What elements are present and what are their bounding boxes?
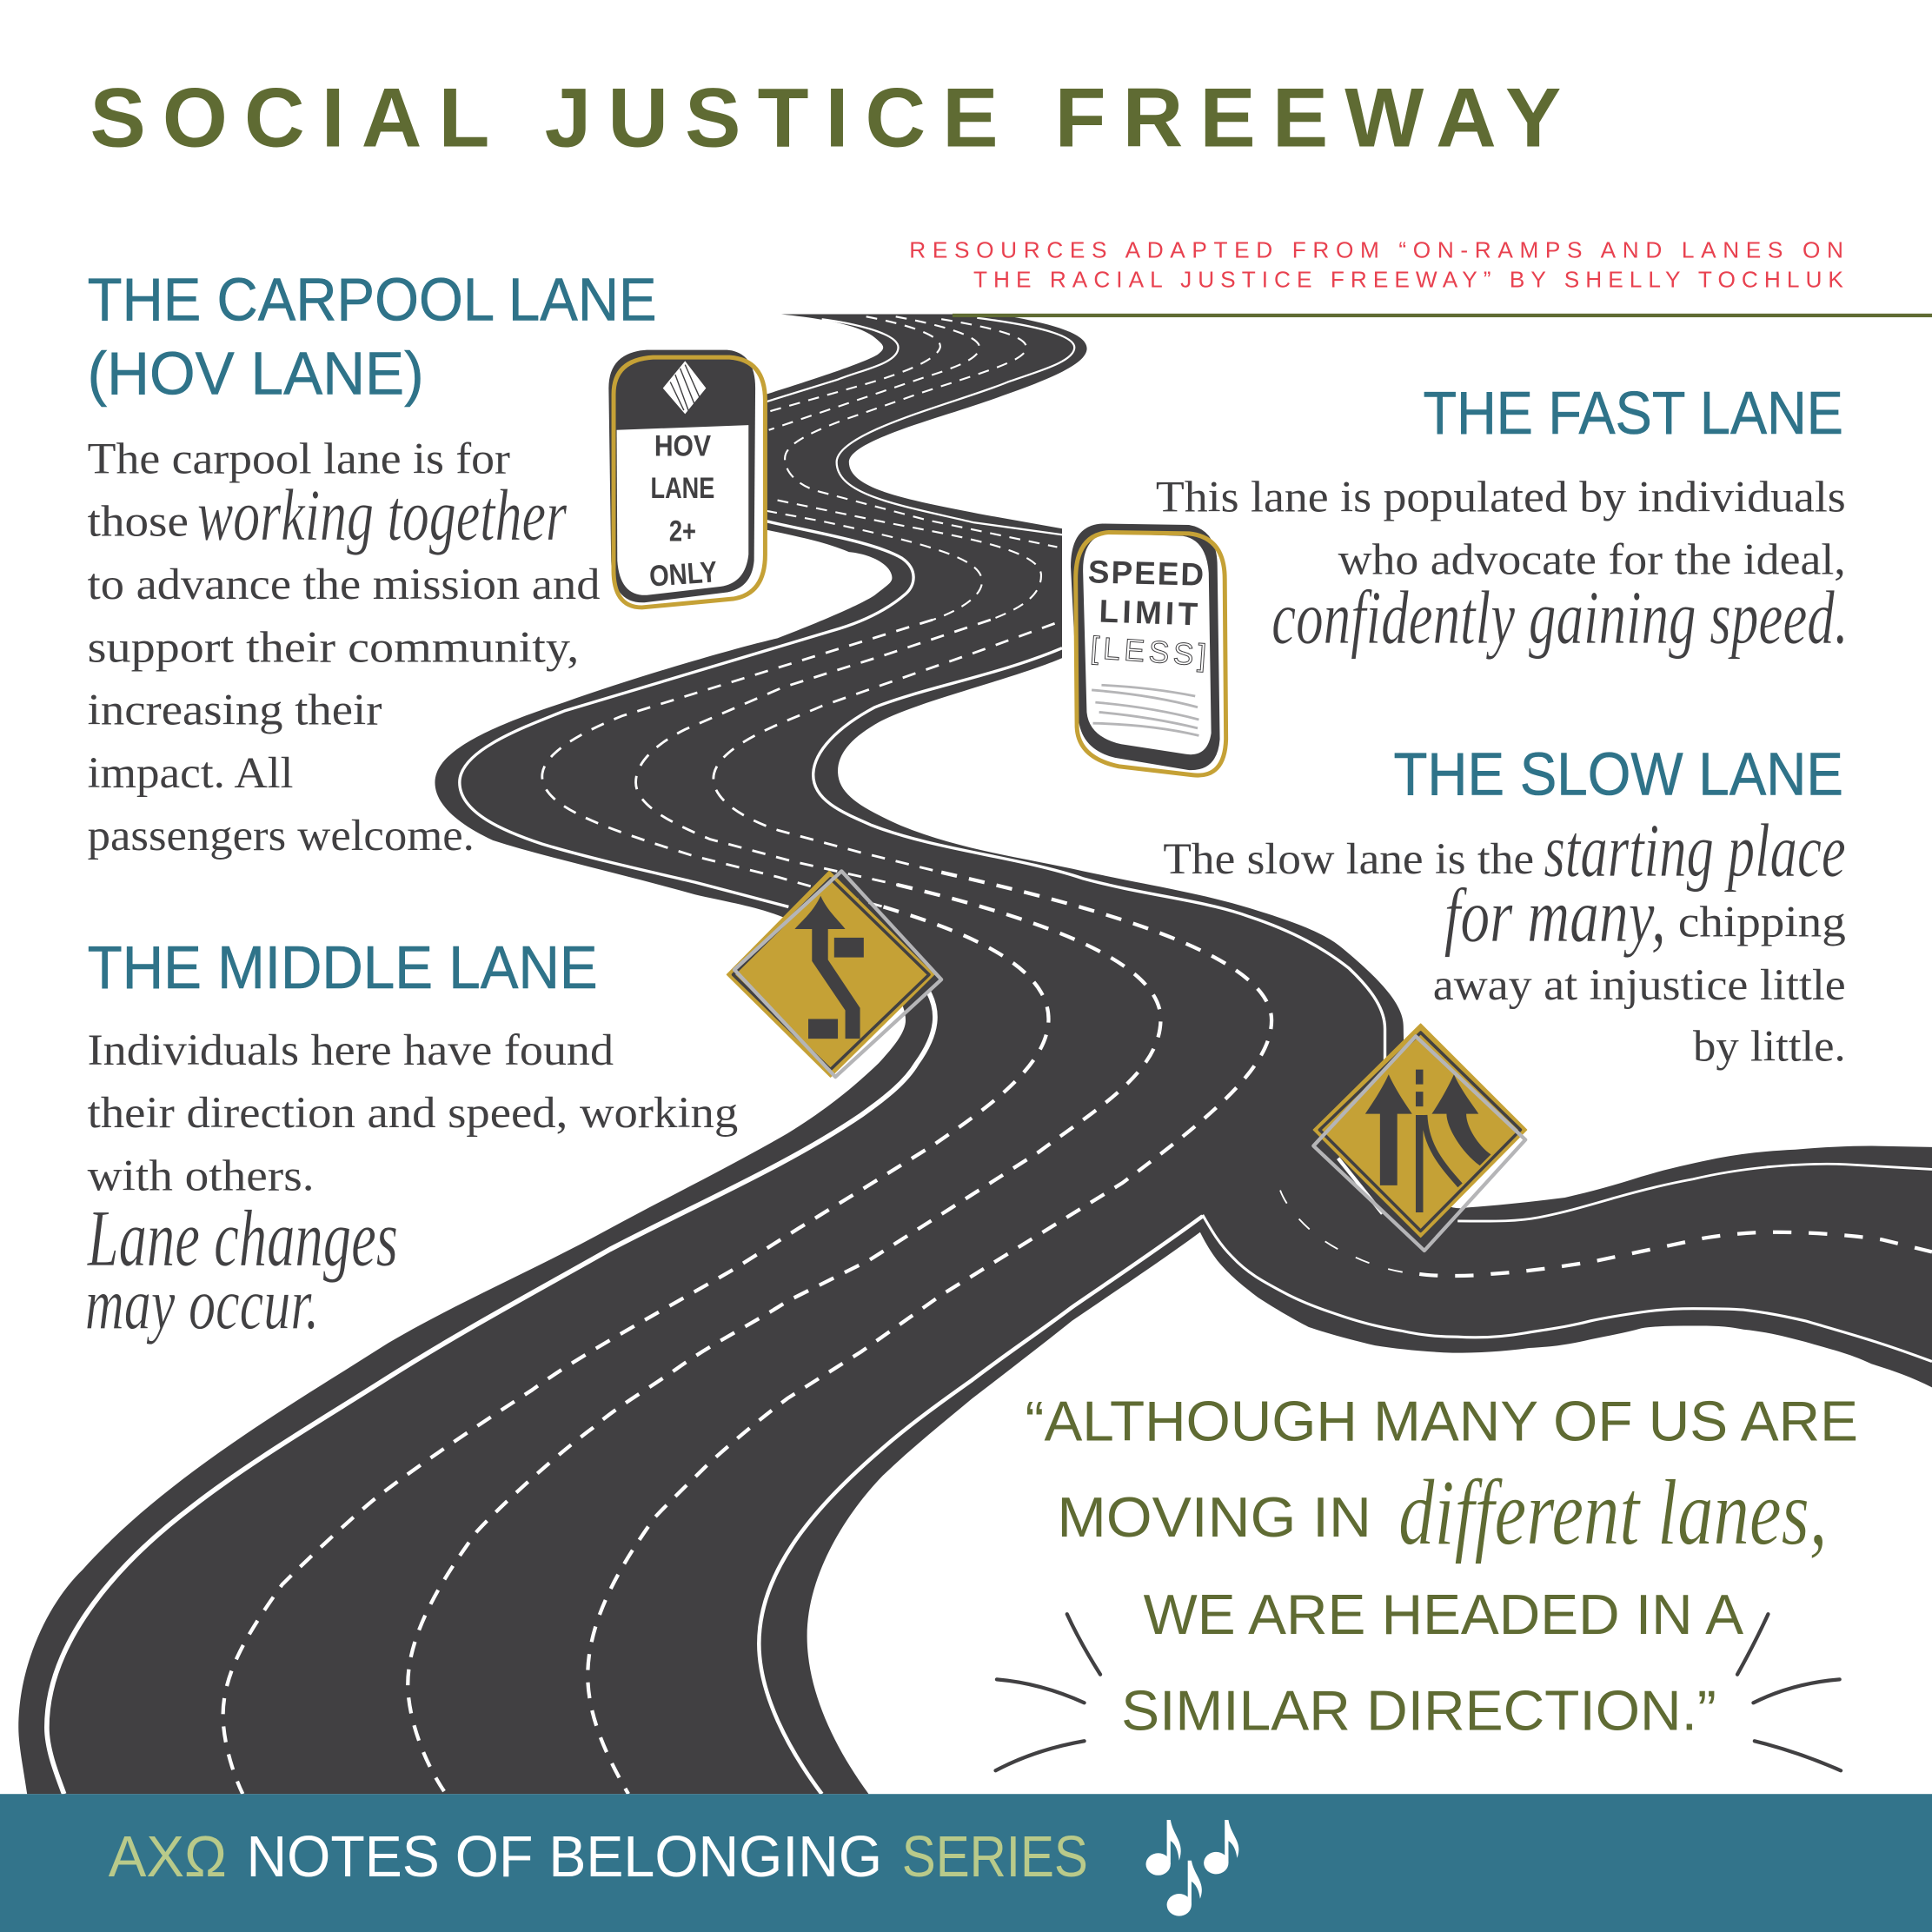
panel: slow lane: [1163, 740, 1846, 1072]
body: carpool lane: The carpool lane is for: [88, 435, 510, 483]
body: slow lane: The slow lane is the: [1163, 835, 1534, 884]
credit text: THE RACIAL JUSTICE FREEWAY” BY SHELLY TOCHLUK: [973, 266, 1843, 292]
body: fast lane: This lane is populated by individuals: [1156, 473, 1846, 521]
body: fast lane: who advocate for the ideal,: [1338, 536, 1846, 585]
sign: HOV lane: ONLY: [648, 555, 719, 594]
body: carpool lane: passengers welcome.: [88, 812, 475, 860]
fine print lines: [1092, 685, 1198, 735]
heading: carpool lane: [88, 266, 657, 408]
icon: hatched diamond: [663, 361, 706, 414]
panel: middle lane: [85, 933, 738, 1344]
heading: middle lane: THE MIDDLE LANE: [88, 933, 598, 1001]
footer text: [109, 1825, 1088, 1889]
footer text: AXΩ: [109, 1825, 227, 1889]
heading: carpool lane: THE CARPOOL LANE: [88, 266, 657, 334]
body: carpool lane: to advance the mission and: [88, 561, 600, 609]
body: carpool lane: working together: [197, 475, 568, 556]
sign: HOV lane: HOV: [654, 430, 711, 463]
panel: carpool lane: [88, 266, 657, 860]
credit text: [909, 236, 1843, 292]
sign: speed limit: [LESS]: [1090, 630, 1207, 673]
body: slow lane: for many,: [1444, 874, 1666, 959]
sign: HOV lane: LANE: [651, 472, 714, 505]
sign: HOV lane: 2+: [669, 515, 696, 548]
credit text: RESOURCES ADAPTED FROM “ON-RAMPS AND LANES ON: [909, 236, 1843, 262]
road illustration: [18, 315, 1932, 1794]
body: middle lane: may occur.: [85, 1263, 319, 1344]
body: middle lane: Individuals here have found: [88, 1026, 614, 1075]
body: middle lane: their direction and speed, working: [88, 1089, 738, 1138]
heading: slow lane: THE SLOW LANE: [1393, 740, 1843, 807]
body: fast lane: [1156, 473, 1849, 661]
quote: WE ARE HEADED IN A: [1144, 1583, 1744, 1646]
body: carpool lane: those: [88, 498, 189, 547]
dashed lane lines: [223, 316, 1932, 1794]
sign: lane shift: [727, 871, 941, 1077]
body: carpool lane: increasing their: [88, 687, 382, 735]
body: slow lane: away at injustice little: [1433, 961, 1846, 1010]
road edge lines: [47, 318, 1932, 1794]
quote: [1026, 1389, 1858, 1742]
body: carpool lane: support their community,: [88, 623, 579, 672]
heading: carpool lane: (HOV LANE): [88, 340, 424, 408]
rule under credit: [953, 314, 1932, 317]
body: carpool lane: impact. All: [88, 749, 293, 798]
body: slow lane: chipping: [1678, 898, 1846, 946]
sign: speed limit: LIMIT: [1099, 594, 1198, 632]
panel: fast lane: [1156, 379, 1849, 661]
body: slow lane: by little.: [1693, 1023, 1846, 1072]
body: slow lane: [1163, 809, 1846, 1072]
footer text: SERIES: [902, 1825, 1088, 1889]
footer band: [0, 1794, 1932, 1932]
body: middle lane: [85, 1026, 738, 1344]
body: carpool lane: [88, 435, 600, 860]
quote: SIMILAR DIRECTION.”: [1121, 1678, 1716, 1742]
heading: fast lane: THE FAST LANE: [1423, 379, 1843, 447]
quote: “ALTHOUGH MANY OF US ARE: [1026, 1389, 1858, 1452]
body: middle lane: Lane changes: [86, 1194, 398, 1284]
quote emphasis rays: [996, 1614, 1841, 1770]
title: SOCIAL JUSTICE FREEWAY: [90, 72, 1561, 165]
road surface: [18, 315, 1932, 1794]
quote: MOVING IN: [1057, 1485, 1371, 1549]
sign: HOV lane: [608, 350, 765, 607]
icon: music notes: [1145, 1820, 1238, 1916]
sign: speed limit: [1062, 522, 1226, 775]
sign: merging lanes: [1313, 1024, 1527, 1251]
body: middle lane: with others.: [88, 1152, 315, 1201]
footer text: NOTES OF BELONGING: [247, 1825, 882, 1889]
sign: speed limit: SPEED: [1087, 554, 1205, 593]
